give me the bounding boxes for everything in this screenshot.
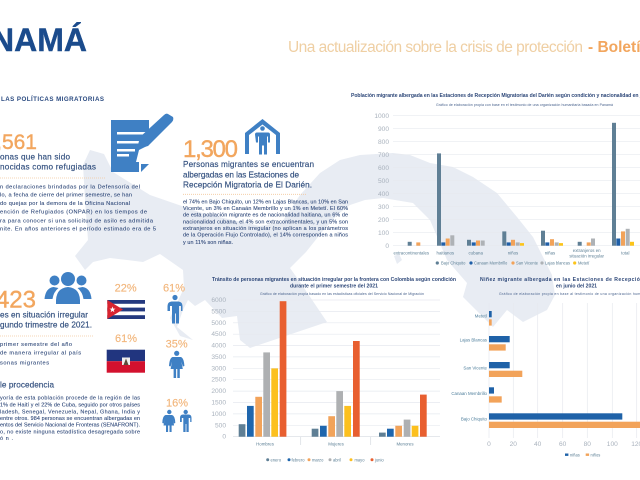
chart title: Tránsito de personas migrantes en situación irregular por la frontera con Colombia según condición [212,277,456,283]
gridlines and y axis [374,113,640,250]
refugees text block: ra para conocer si una solicitud de asilo es admitida [0,218,154,224]
panel: people in reception stations [183,136,348,246]
refugees heading: nocidas como refugiadas [0,163,96,172]
chart: border crossings by month [211,277,456,462]
flag: Haiti [107,350,145,373]
chart title [480,277,640,289]
category labels: haitianos [437,250,455,256]
category labels [256,442,414,446]
gridlines and y axis: 0 [222,434,226,441]
category labels: Menores [396,442,414,446]
gridlines and y axis: 200 [378,217,389,224]
origin text block [0,395,140,442]
chart title: durante el primer semestre del 2021 [290,283,378,289]
origin heading: le procedencia [0,380,54,389]
category labels: Lajas Blancas [460,338,488,343]
gridlines and y axis: 3500 [211,354,226,361]
category labels: total [621,250,629,256]
origin text block: entos del Servicio Nacional de Fronteras (SENAFRONT). [0,422,140,428]
reception stations text block [183,199,348,246]
icon: woman [169,351,184,378]
background map of Panama [75,150,555,348]
category labels: cubana [468,250,483,256]
gridlines and y axis: 2500 [211,377,226,384]
category labels: Hombres [256,442,275,446]
gridlines and y axis: 600 [378,165,389,172]
legend: abril [333,457,341,462]
bars: marzo [255,397,402,437]
legend [565,452,600,457]
origin text block: o, no existe ninguna estadística desagregada sobre [0,429,140,435]
bars: niños [489,319,640,428]
gridlines and y axis: 500 [215,422,226,429]
gridlines and y axis: 4000 [211,342,226,350]
bars: mayo [271,368,418,437]
vertical gridlines and x axis [487,303,640,448]
legend: niñas [570,452,580,457]
gridlines and y axis: 1500 [211,400,226,406]
legend: niños [590,452,600,457]
gridlines and y axis: 4500 [211,331,226,338]
category labels: Canaan Membrillo [451,391,488,396]
legend: Lajas blancas [545,261,570,266]
percentages: 35% [166,338,188,350]
bars: junio [280,301,427,437]
bars: Bajo Chiquito [408,123,616,246]
chart: migrant population in reception stations [351,93,640,266]
bars: San Vicente [416,231,625,246]
vertical gridlines and x axis: 40 [534,441,542,448]
icon: group of people [44,272,92,304]
gridlines and y axis: 100 [378,230,389,237]
reception stations text block: de la Operación Flujo Controlado), el 14% corresponden a niños [183,233,348,239]
percentages: 22% [115,283,137,295]
irregular migrants heading: es en situación irregular [0,310,88,319]
category labels [451,313,488,422]
gridlines and y axis: 500 [378,178,389,185]
vertical gridlines and x axis: 20 [510,441,517,448]
chart: migrant children by station [451,277,640,457]
vertical gridlines and x axis: 0 [487,441,491,448]
gridlines and y axis: 5000 [211,320,226,327]
gridlines and y axis: 1000 [211,411,226,418]
gridlines and y axis: 6000 [211,297,226,304]
category labels: niños [508,250,519,256]
reception stations text block: extranjeros en situación irregular (no aplican a los parámetros [183,226,348,232]
category labels: extracontinentales [393,250,430,256]
category labels: situación irregular [569,254,605,258]
origin text block: entre otros. 984 personas se encuentran albergadas en [0,416,140,422]
reception stations text block: y un 11% son niñas. [183,240,233,246]
legend: San Vicente [516,261,539,266]
stat: 1,300: 1,300 [183,136,238,163]
legend: Metetí [578,261,590,266]
origin text block: ladesh, Senegal, Venezuela, Nepal, Ghana, India y [0,409,140,415]
gridlines and y axis: 3000 [211,365,226,372]
icon: man [168,295,182,324]
category labels: Mujeres [328,442,345,446]
bars: enero [239,424,386,437]
legend: marzo [312,457,324,462]
panel: irregular migrants [0,287,94,367]
category labels: Metetí [475,313,488,318]
vertical gridlines and x axis: 100 [607,441,618,448]
refugees text block [0,184,156,233]
gridlines and y axis [211,297,440,445]
subtitle: Una actualización sobre la crisis de protección [288,39,583,56]
reception stations text block: nacionalidad cubana, el 4% son extracontinentales, y un 5% son [183,219,348,225]
irregular migrants heading: gundo trimestre de 2021. [0,320,92,329]
reception stations heading: albergadas en las Estaciones de [183,170,299,179]
vertical gridlines and x axis: 80 [584,441,591,448]
legend: junio [374,457,384,462]
chart title [212,277,456,289]
refugees heading [0,152,96,172]
category labels: Bajo Chiquito [461,417,488,422]
legend [436,261,590,266]
chart title: en junio del 2021 [556,283,597,289]
reception stations heading [183,160,314,189]
irregular migrants text: primer semestre del año [0,342,72,348]
category labels: niñas [545,250,556,256]
bars: niñas [489,311,622,420]
icon: house with person [245,119,280,154]
icon: children [162,410,192,432]
percentages [115,283,188,410]
irregular migrants text [0,342,81,367]
refugees heading: onas que han sido [0,152,70,162]
bars: Canaan Membrillo [441,238,620,246]
gridlines and y axis: 1000 [374,113,389,120]
reception stations text block: Vicente, un 3% en Canaán Membrillo y un 1% en Metetí. El 60% [183,206,348,212]
icon: document and pen [111,114,173,172]
irregular migrants heading [0,310,92,329]
chart source note: Gráfico de elaboración propia con base en el testimonio de una organización humanitaria basada en Panamá [436,103,613,107]
refugees text block: ención de Refugiados (ONPAR) en los tiempos de [0,210,147,216]
gridlines and y axis: 300 [378,204,389,211]
origin text block: ón. [0,436,13,442]
irregular migrants text: sonas migrantes [0,361,49,367]
panel: countries of origin [0,380,140,442]
bars: abril [263,352,410,437]
legend: enero [270,457,282,462]
bars: Lajas Blancas [450,229,630,246]
origin text block: yoría de esta población procede de la región de las [0,395,140,401]
gridlines and y axis: 0 [385,243,389,250]
legend: Bajo Chiquito [441,261,466,266]
legend: febrero [292,457,305,462]
gridlines and y axis: 5500 [211,308,226,315]
refugees text block: nite. En años anteriores el período estimado era de 5 [0,227,156,233]
refugees text block: lo, a fecha de cierre del primer semestre, se han [0,193,132,199]
reception stations heading: Recepción Migratoria de El Darién. [183,180,312,189]
irregular migrants text: de manera irregular al país [0,351,81,357]
chart source note: Gráfico de elaboración propia basado en las estadísticas oficiales del Servicio Nacional de Migración [260,292,424,296]
reception stations text block: de esta población migrante es de nacionalidad haitiana, un 6% de [183,212,348,218]
legend: mayo [354,457,365,462]
refugees text block: n declaraciones brindadas por la Defensoría del [0,184,140,190]
gridlines and y axis: 2000 [211,388,226,395]
section heading: migration policies: LAS POLÍTICAS MIGRATORIAS [1,95,104,103]
reception stations heading: Personas migrantes se encuentran [183,160,314,169]
reception stations text block: el 74% en Bajo Chiquito, un 12% en Lajas Blancas, un 10% en San [183,199,348,205]
flag: Cuba [107,300,145,319]
percentages: 16% [166,398,188,410]
percentages: 61% [163,283,185,295]
bars: febrero [247,406,394,437]
refugees text block: do quejas por la demora de la Oficina Nacional [0,201,130,207]
category labels [393,248,629,258]
origin text block: 1% de Haití y el 22% de Cuba, seguido por otros países [0,402,140,408]
percentages: 61% [115,333,137,345]
panel: recognised refugees [0,131,156,233]
gridlines and y axis: 800 [378,139,389,146]
category labels: San Vicente [463,366,488,371]
gridlines and y axis: 400 [378,191,389,198]
category labels: extranjeros en [573,248,601,253]
gridlines and y axis: 900 [378,126,389,133]
gridlines and y axis: 700 [378,152,389,159]
bars: Metetí [520,242,634,246]
vertical gridlines and x axis: 60 [559,441,567,448]
legend [266,457,384,462]
legend: Canaan Membrillo [474,261,508,266]
